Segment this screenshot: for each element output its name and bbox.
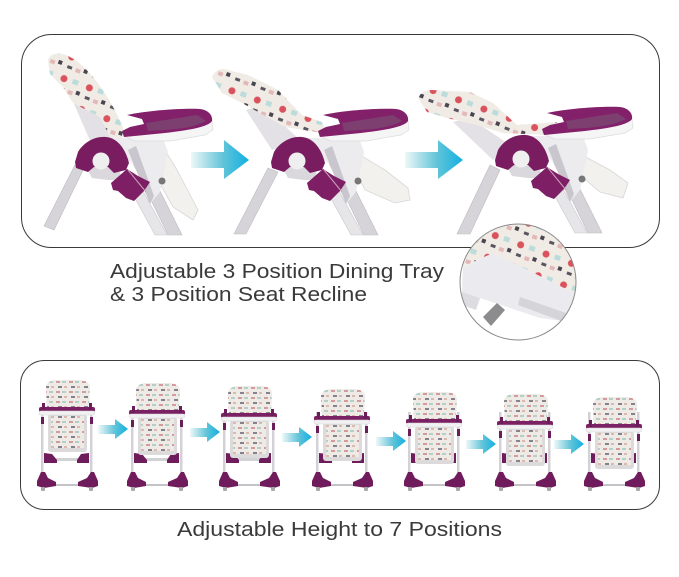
heading: height caption: Adjustable Height to 7 Positions	[177, 519, 502, 541]
arrow: height step 6	[554, 434, 584, 454]
chair: height position 5	[404, 392, 465, 491]
chair: height position 3	[219, 386, 280, 491]
panel: recline and tray positions	[22, 34, 660, 248]
chair: side view, full recline	[418, 90, 633, 234]
chair: side view, mid recline	[212, 69, 410, 235]
chair: side view, upright seat	[44, 54, 213, 235]
chair: height position 7	[584, 397, 645, 491]
arrow: height step 3	[282, 427, 312, 447]
arrow: first recline step	[191, 140, 249, 179]
heading: tray and recline caption: Adjustable 3 Position Dining Tray	[110, 261, 444, 283]
arrow: height step 4	[376, 431, 406, 451]
callout: tray detail circle	[460, 222, 578, 340]
heading: tray and recline caption	[110, 261, 444, 306]
panel: height positions	[20, 360, 660, 510]
chair: height position 4	[312, 389, 373, 491]
heading: tray and recline caption: & 3 Position Seat Recline	[110, 284, 367, 306]
arrow: height step 2	[190, 422, 220, 442]
arrow: height step 1	[98, 419, 128, 439]
chair: height position 6	[495, 394, 556, 491]
arrow: height step 5	[466, 434, 496, 454]
arrow: second recline step	[405, 140, 463, 179]
chair: height position 1	[37, 380, 98, 491]
chair: height position 2	[127, 383, 188, 491]
